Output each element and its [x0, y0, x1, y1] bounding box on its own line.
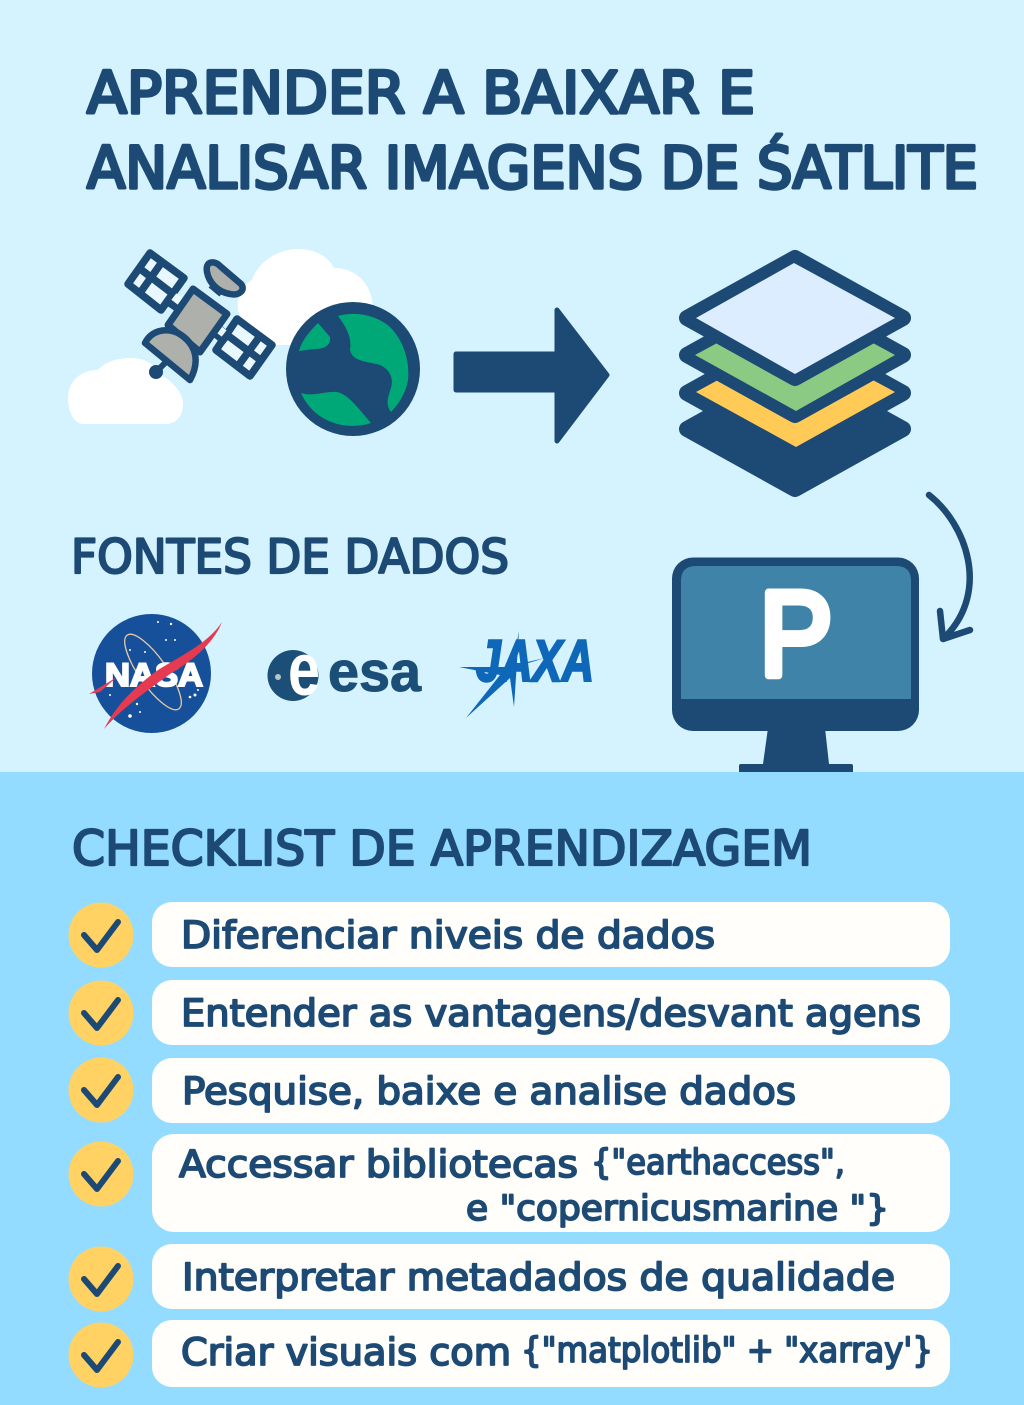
- screen: [681, 566, 911, 699]
- top dish: [207, 262, 243, 294]
- checklist item 3: [68, 1058, 950, 1123]
- heading: fontes de dados: FONTES DE DADOS: [71, 530, 509, 585]
- checklist item 2: [68, 980, 950, 1046]
- logo: ESA: [268, 628, 422, 711]
- logo: ESA: esa: [328, 640, 422, 704]
- monitor body: [672, 558, 919, 731]
- arrow: layers to computer: [929, 495, 970, 639]
- logo: JAXA: [459, 629, 594, 718]
- icon: satellite: [128, 253, 272, 380]
- checklist item 4: [68, 1134, 950, 1232]
- checklist item 5: [68, 1244, 950, 1312]
- checklist item 6: [68, 1320, 950, 1388]
- checklist item 4: {"earthaccess",: [591, 1143, 845, 1183]
- title: ANALISAR IMAGENS DE ŚATLITE: [87, 133, 978, 202]
- green layer outline: [687, 295, 903, 415]
- top layer: [696, 263, 895, 374]
- icon: computer monitor: [672, 558, 919, 772]
- stand: [739, 728, 853, 772]
- title: [87, 59, 978, 202]
- body: [168, 289, 227, 352]
- icon: data layers stack: [687, 258, 903, 489]
- top layer outline: [687, 258, 903, 378]
- arrow: satellite to layers: [456, 310, 607, 441]
- checklist item 1: [68, 902, 950, 968]
- checklist item 6: {"matplotlib" + "xarray'}: [521, 1331, 933, 1371]
- checklist item 3: Pesquise, baixe e analise dados: [182, 1070, 796, 1113]
- logo: ESA: e: [288, 628, 320, 711]
- logo: JAXA: JAXA: [476, 629, 594, 694]
- top background panel: [0, 0, 1024, 772]
- yellow layer: [696, 338, 895, 447]
- right solar panel: [216, 319, 272, 376]
- icon: earth globe: [286, 302, 420, 436]
- connector windows: [171, 293, 227, 337]
- icon: clouds: [68, 249, 373, 424]
- checklist item 5: Interpretar metadados de qualidade: [182, 1256, 895, 1299]
- logo: NASA: [89, 614, 222, 733]
- main dish: [145, 330, 196, 380]
- logo: NASA: NASA: [105, 657, 203, 693]
- yellow layer outline: [687, 333, 903, 453]
- title: APRENDER A BAIXAR E: [87, 59, 755, 127]
- green layer: [695, 301, 895, 411]
- bottom layer: [687, 369, 903, 489]
- checklist item 6: Criar visuais com: [181, 1331, 511, 1374]
- letter P: P: [760, 567, 832, 701]
- connectors: [168, 280, 228, 340]
- bottom checklist background panel: [0, 772, 1024, 1405]
- checklist item 4: e "copernicusmarine "}: [466, 1189, 889, 1229]
- checklist item 4: Accessar bibliotecas: [179, 1143, 578, 1186]
- checklist item 2: Entender as vantagens/desvant agens: [181, 992, 921, 1035]
- heading: checklist: CHECKLIST DE APRENDIZAGEM: [72, 821, 812, 877]
- checklist item 1: Diferenciar niveis de dados: [181, 914, 715, 957]
- dish handle: [156, 362, 166, 372]
- left solar panel: [128, 253, 184, 310]
